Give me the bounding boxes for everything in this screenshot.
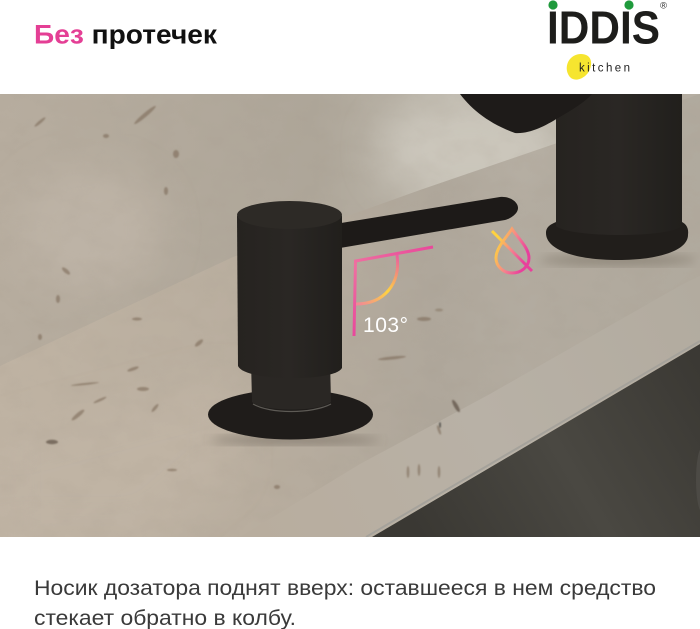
angle value: 103° <box>363 314 408 337</box>
description text <box>34 576 656 629</box>
logo yellow blob <box>567 54 591 80</box>
dispenser shadow <box>211 436 379 444</box>
dispenser neck ring <box>253 404 331 412</box>
dispenser cap <box>237 201 342 226</box>
counter top surface <box>3 144 638 537</box>
logo: IDDIS kitchen <box>547 0 667 80</box>
faucet column <box>556 94 682 235</box>
faucet shadow <box>540 255 696 265</box>
drop slash <box>492 231 532 271</box>
angle arc <box>356 255 398 304</box>
sink <box>372 344 700 537</box>
logo kitchen word: kitchen <box>579 62 630 74</box>
counter light region <box>0 380 230 537</box>
drop outline <box>496 229 529 273</box>
logo green dot left <box>548 0 558 10</box>
logo green dot right <box>624 0 634 10</box>
dispenser base plate <box>208 390 373 440</box>
faucet spout <box>460 94 592 133</box>
faucet base <box>546 222 688 260</box>
photo: dispenser on stone counter <box>0 94 700 537</box>
dispenser arm <box>335 197 518 248</box>
stone pits <box>34 104 461 489</box>
wall <box>0 94 700 537</box>
angle marker <box>354 247 433 336</box>
faucet <box>460 94 696 265</box>
logo registered mark: ® <box>660 0 667 12</box>
logo wordmark: IDDIS <box>547 2 660 54</box>
angle lines <box>354 247 433 336</box>
wall light patch <box>376 103 554 192</box>
counter front edge <box>241 376 538 537</box>
wall light patch left <box>54 191 146 266</box>
stone mottling <box>0 94 700 537</box>
description line 1: Носик дозатора поднят вверх: оставшееся в нем средство <box>34 576 656 600</box>
dispenser <box>208 197 518 444</box>
title: Без протечек <box>34 20 217 50</box>
dispenser neck <box>251 374 331 410</box>
dispenser body <box>237 216 342 378</box>
sink drain hint <box>696 448 700 512</box>
icon: crossed-out drop <box>492 229 532 273</box>
sink rim highlight <box>366 341 700 537</box>
